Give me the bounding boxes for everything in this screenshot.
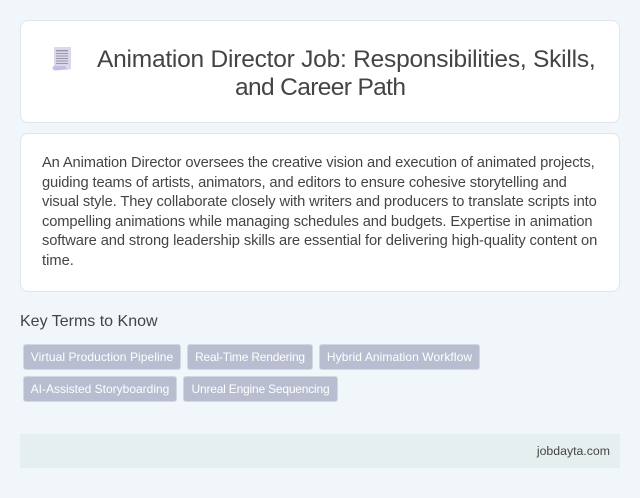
tag: Virtual Production Pipeline: Virtual Production Pipeline [31, 350, 173, 364]
icon: document scroll [52, 47, 71, 70]
tag: Virtual Production Pipeline [23, 344, 181, 370]
text block: description: time. [42, 252, 74, 268]
panel: header card [20, 20, 620, 123]
tag: Unreal Engine Sequencing [183, 376, 338, 402]
text block: description: visual style. They collaborate closely with writers and producers to translate scripts into [42, 194, 597, 210]
tag: Unreal Engine Sequencing: Unreal Engine Sequencing [192, 382, 329, 396]
text block: description: guiding teams of artists, animators, and editors to ensure cohesive storytelling and [42, 174, 567, 190]
title: and Career Path [235, 74, 405, 101]
text block: description [42, 155, 597, 268]
tag: AI-Assisted Storyboarding: AI-Assisted Storyboarding [31, 382, 169, 396]
tag: AI-Assisted Storyboarding [23, 376, 177, 402]
text block: description: An Animation Director oversees the creative vision and execution of animated projects, [42, 155, 595, 171]
footer bar [20, 434, 620, 468]
title: Animation Director Job: Responsibilities, Skills, [97, 46, 595, 73]
tags [23, 344, 480, 402]
footer source text: jobdayta.com [537, 444, 610, 458]
text block: description: compelling animations while managing schedules and budgets. Expertise in animation [42, 214, 592, 230]
tag: Hybrid Animation Workflow: Hybrid Animation Workflow [327, 350, 472, 364]
text block: description: software and strong leadership skills are essential for delivering high-quality content on [42, 233, 597, 249]
tag: Real-Time Rendering: Real-Time Rendering [195, 350, 305, 364]
tag: Real-Time Rendering [187, 344, 313, 370]
panel: description card [20, 133, 620, 292]
title [97, 46, 595, 101]
heading: key terms: Key Terms to Know [20, 313, 158, 330]
tag: Hybrid Animation Workflow [319, 344, 480, 370]
